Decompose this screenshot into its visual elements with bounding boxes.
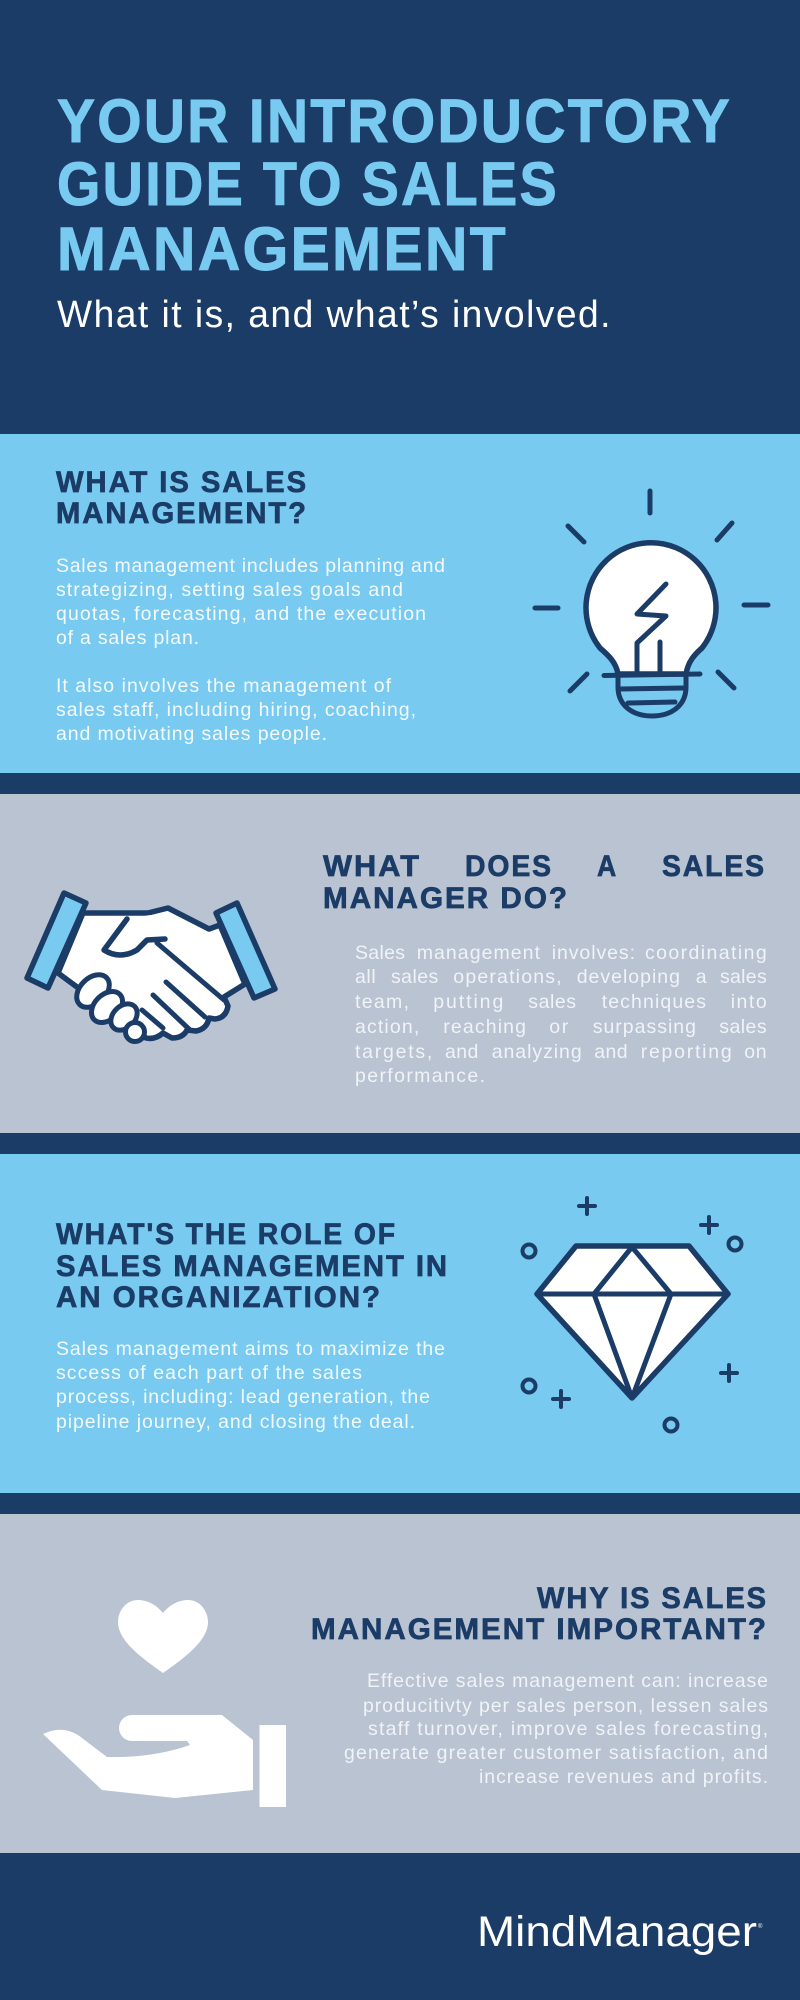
body text: pipeline journey, and closing the deal. <box>56 1411 415 1433</box>
body text: on <box>744 1041 767 1063</box>
body text: It also involves the management of <box>56 675 392 697</box>
body text: staff turnover, improve sales forecasting, <box>368 1718 768 1740</box>
title: YOUR INTRODUCTORY <box>57 87 732 155</box>
heading: SALES MANAGEMENT IN <box>56 1250 449 1283</box>
body text: producitivty per sales person, lessen sales <box>363 1695 768 1717</box>
body text <box>56 555 445 745</box>
body text: and motivating sales people. <box>56 723 327 745</box>
footer logo: ® <box>758 1923 763 1930</box>
heading: MANAGER DO? <box>323 882 569 915</box>
body text: targets, <box>355 1041 432 1063</box>
panel: what is sales management <box>0 434 800 773</box>
body text: operations, <box>453 966 562 988</box>
body text: coordinating <box>645 942 767 964</box>
body text: involves: <box>552 942 635 964</box>
footer logo: MindManager <box>477 1908 757 1956</box>
body text: putting <box>433 991 503 1013</box>
title <box>57 87 732 283</box>
body text: sales <box>719 1016 767 1038</box>
body text: and <box>594 1041 628 1063</box>
body text: generate greater customer satisfaction, and <box>344 1742 768 1764</box>
body text: into <box>731 991 767 1013</box>
title: MANAGEMENT <box>57 215 508 283</box>
heading <box>56 1218 449 1314</box>
panel: what does a sales manager do <box>0 794 800 1133</box>
panel: why is sales management important <box>0 1514 800 1853</box>
body text: Sales <box>355 942 405 964</box>
body text: Sales management aims to maximize the <box>56 1338 445 1360</box>
heading: WHAT <box>323 850 421 883</box>
body text: sales <box>391 966 439 988</box>
body text: analyzing <box>492 1041 582 1063</box>
body text: reaching <box>443 1016 526 1038</box>
heading: MANAGEMENT IMPORTANT? <box>311 1613 768 1646</box>
subtitle: What it is, and what’s involved. <box>57 294 612 336</box>
body text: Effective sales management can: increase <box>367 1670 768 1692</box>
heading <box>56 466 308 530</box>
body text: developing <box>577 966 680 988</box>
body text: Sales management includes planning and <box>56 555 445 577</box>
body text: a <box>696 966 707 988</box>
body text <box>344 1670 768 1788</box>
heading: A <box>597 850 618 883</box>
body text: and <box>445 1041 478 1063</box>
icon: diamond <box>522 1198 742 1432</box>
body text: performance. <box>355 1065 485 1087</box>
heading: WHAT IS SALES <box>56 466 308 499</box>
icon: handshake <box>27 893 275 1042</box>
heading <box>323 850 766 915</box>
body text: team, <box>355 991 409 1013</box>
heading <box>311 1582 768 1646</box>
body text: quotas, forecasting, and the execution <box>56 603 426 625</box>
body text: or <box>549 1016 569 1038</box>
heading: WHY IS SALES <box>537 1582 768 1615</box>
body text: action, <box>355 1016 419 1038</box>
body text: management <box>417 942 541 964</box>
body text: techniques <box>602 991 706 1013</box>
header <box>57 87 732 336</box>
heading: AN ORGANIZATION? <box>56 1281 382 1314</box>
body text <box>56 1338 445 1433</box>
body text <box>355 942 767 1087</box>
icon: hand with heart <box>43 1600 286 1807</box>
body text: reporting <box>641 1041 732 1063</box>
heading: DOES <box>465 850 553 883</box>
body text: sales staff, including hiring, coaching, <box>56 699 416 721</box>
body text: sales <box>720 966 767 988</box>
heading: SALES <box>662 850 766 883</box>
body text: all <box>355 966 376 988</box>
heading: MANAGEMENT? <box>56 497 308 530</box>
body text: increase revenues and profits. <box>479 1766 768 1788</box>
body text: of a sales plan. <box>56 627 199 649</box>
body text: sccess of each part of the sales <box>56 1362 362 1384</box>
panel: role of sales management <box>0 1154 800 1493</box>
heading: WHAT'S THE ROLE OF <box>56 1218 397 1251</box>
title: GUIDE TO SALES <box>57 150 559 218</box>
body text: strategizing, setting sales goals and <box>56 579 403 601</box>
body text: surpassing <box>593 1016 696 1038</box>
icon: light bulb <box>535 491 768 716</box>
body text: process, including: lead generation, the <box>56 1386 430 1408</box>
body text: sales <box>528 991 576 1013</box>
